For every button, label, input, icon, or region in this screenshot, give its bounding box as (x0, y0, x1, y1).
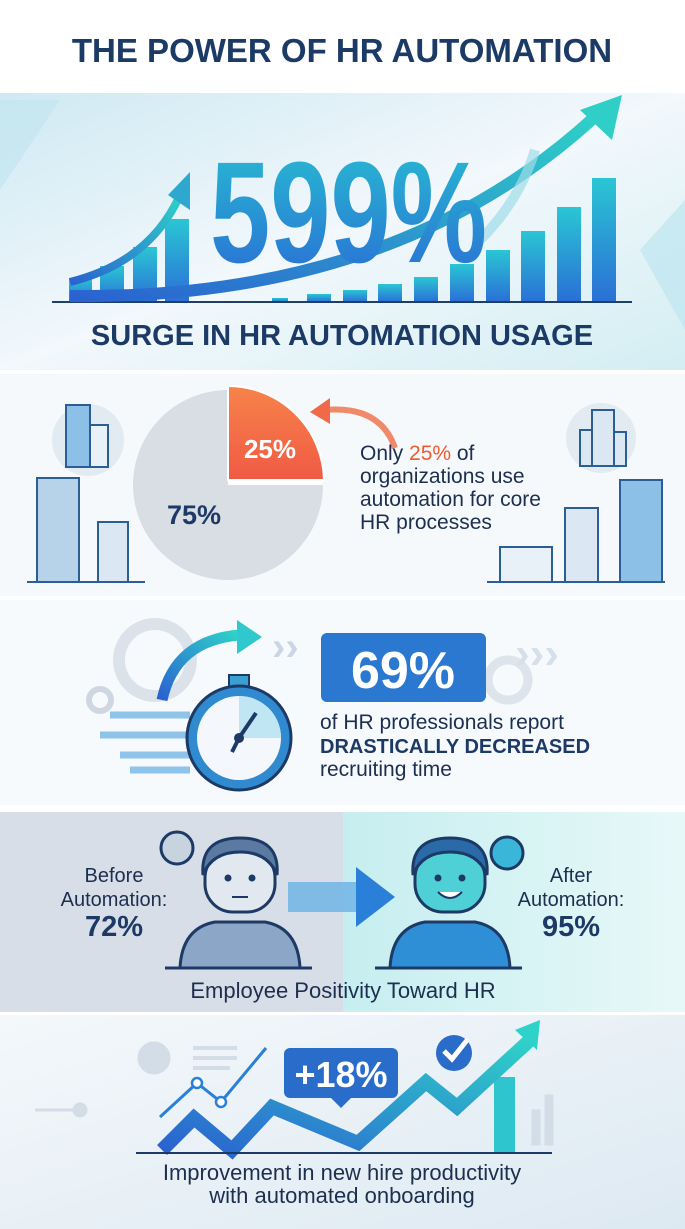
arrow: growth (70, 95, 622, 296)
icon: neutral person (161, 832, 312, 968)
icon: gears (119, 624, 191, 696)
panel: recruiting: ››› (515, 629, 559, 678)
callout text: automation for core (360, 488, 541, 511)
subtitle: SURGE IN HR AUTOMATION USAGE (91, 320, 593, 352)
callout text: Only 25% of (360, 442, 474, 465)
text: after: Automation: (518, 889, 624, 911)
text: recruiting: DRASTICALLY DECREASED (320, 736, 590, 758)
panel: recruiting (0, 600, 685, 805)
text: before: 72% (85, 911, 143, 943)
bar chart (69, 178, 616, 302)
callout text: HR processes (360, 511, 492, 534)
panel: adoption (0, 374, 685, 596)
line chart (136, 1020, 552, 1153)
stat badge (321, 633, 486, 702)
icon: buildings left (27, 404, 145, 582)
arrow: callout (310, 398, 395, 448)
icon: buildings right (487, 403, 665, 582)
text: before: Before (85, 865, 143, 887)
panel: positivity (0, 812, 685, 1012)
text: recruiting: of HR professionals report (320, 711, 564, 734)
stat badge (284, 1048, 398, 1108)
text: after: After (550, 865, 592, 887)
caption: with automated onboarding (208, 1183, 475, 1208)
icon: check badge (436, 1035, 472, 1071)
big number: 599% (210, 132, 487, 293)
icon: stopwatch (100, 620, 291, 790)
caption: Employee Positivity Toward HR (190, 978, 496, 1003)
pie chart: 75% (167, 500, 221, 530)
text: before: Automation: (61, 889, 167, 911)
arrow: before to after (288, 867, 395, 927)
panel: surge (0, 93, 685, 370)
pie chart: 25% (244, 434, 296, 464)
icon: happy person (375, 837, 523, 968)
title: THE POWER OF HR AUTOMATION (72, 32, 612, 69)
callout text: organizations use (360, 465, 525, 488)
panel: onboarding (0, 1015, 685, 1229)
icon: chevrons: ›› (272, 625, 299, 669)
icon: decorative data (35, 1042, 553, 1145)
caption: Improvement in new hire productivity (163, 1160, 521, 1185)
text: after: 95% (542, 911, 600, 943)
stat badge: +18% (294, 1054, 388, 1095)
text: recruiting: recruiting time (320, 758, 452, 781)
pie chart (133, 386, 324, 580)
panel: recruiting: 69% (351, 642, 455, 700)
